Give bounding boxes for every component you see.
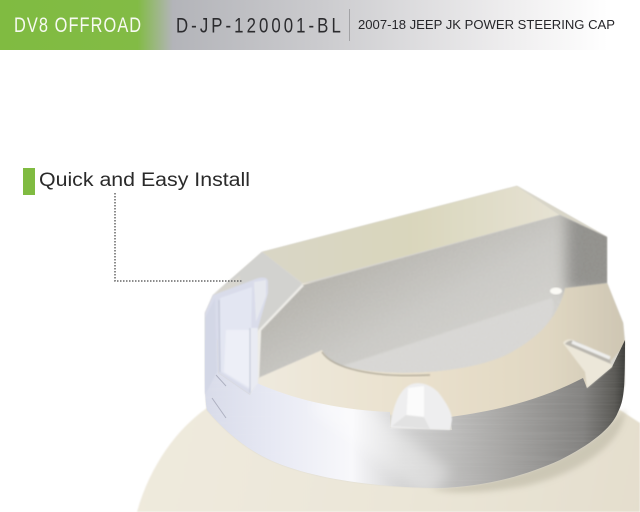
cap body silhouette	[205, 186, 625, 488]
product name: 2007-18 JEEP JK POWER STEERING CAP	[358, 18, 615, 32]
green marker	[23, 168, 35, 195]
dark right section of upper face	[558, 216, 608, 294]
product photo: power steering cap	[137, 186, 640, 512]
lighter disc crescent	[346, 304, 540, 372]
white bottle base	[137, 408, 640, 512]
left corner facet	[213, 252, 303, 330]
upper face and textured disc	[258, 215, 608, 378]
header divider	[349, 9, 350, 41]
bright highlight on disc	[550, 288, 562, 294]
shadow under cap	[430, 410, 625, 492]
brand name: DV8 OFFROAD	[14, 13, 141, 36]
machined outer ring	[200, 335, 630, 495]
scratches on ring	[212, 375, 226, 418]
right corner facet	[517, 186, 607, 237]
right notch	[563, 339, 612, 388]
left notch	[205, 278, 268, 395]
front notch	[390, 383, 452, 430]
bright edge on face	[258, 285, 303, 378]
callout text: Quick and Easy Install	[39, 170, 250, 191]
header banner	[0, 0, 640, 50]
dotted leader line	[115, 193, 243, 281]
part number: D-JP-120001-BL	[176, 15, 341, 38]
shadow under disc	[322, 352, 430, 376]
beige floor	[250, 283, 625, 422]
angled top chamfer	[262, 186, 560, 283]
callout: quick and easy install	[23, 168, 250, 281]
